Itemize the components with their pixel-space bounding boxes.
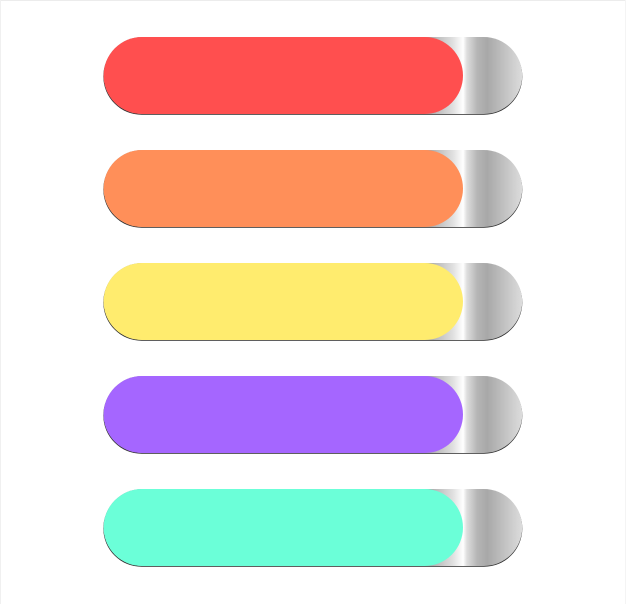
bar 1: red <box>103 37 522 115</box>
bar 4: purple <box>103 376 522 454</box>
bar 5: turquoise <box>103 489 522 567</box>
bar 2: orange <box>103 150 522 228</box>
bar 3: yellow <box>103 263 522 341</box>
